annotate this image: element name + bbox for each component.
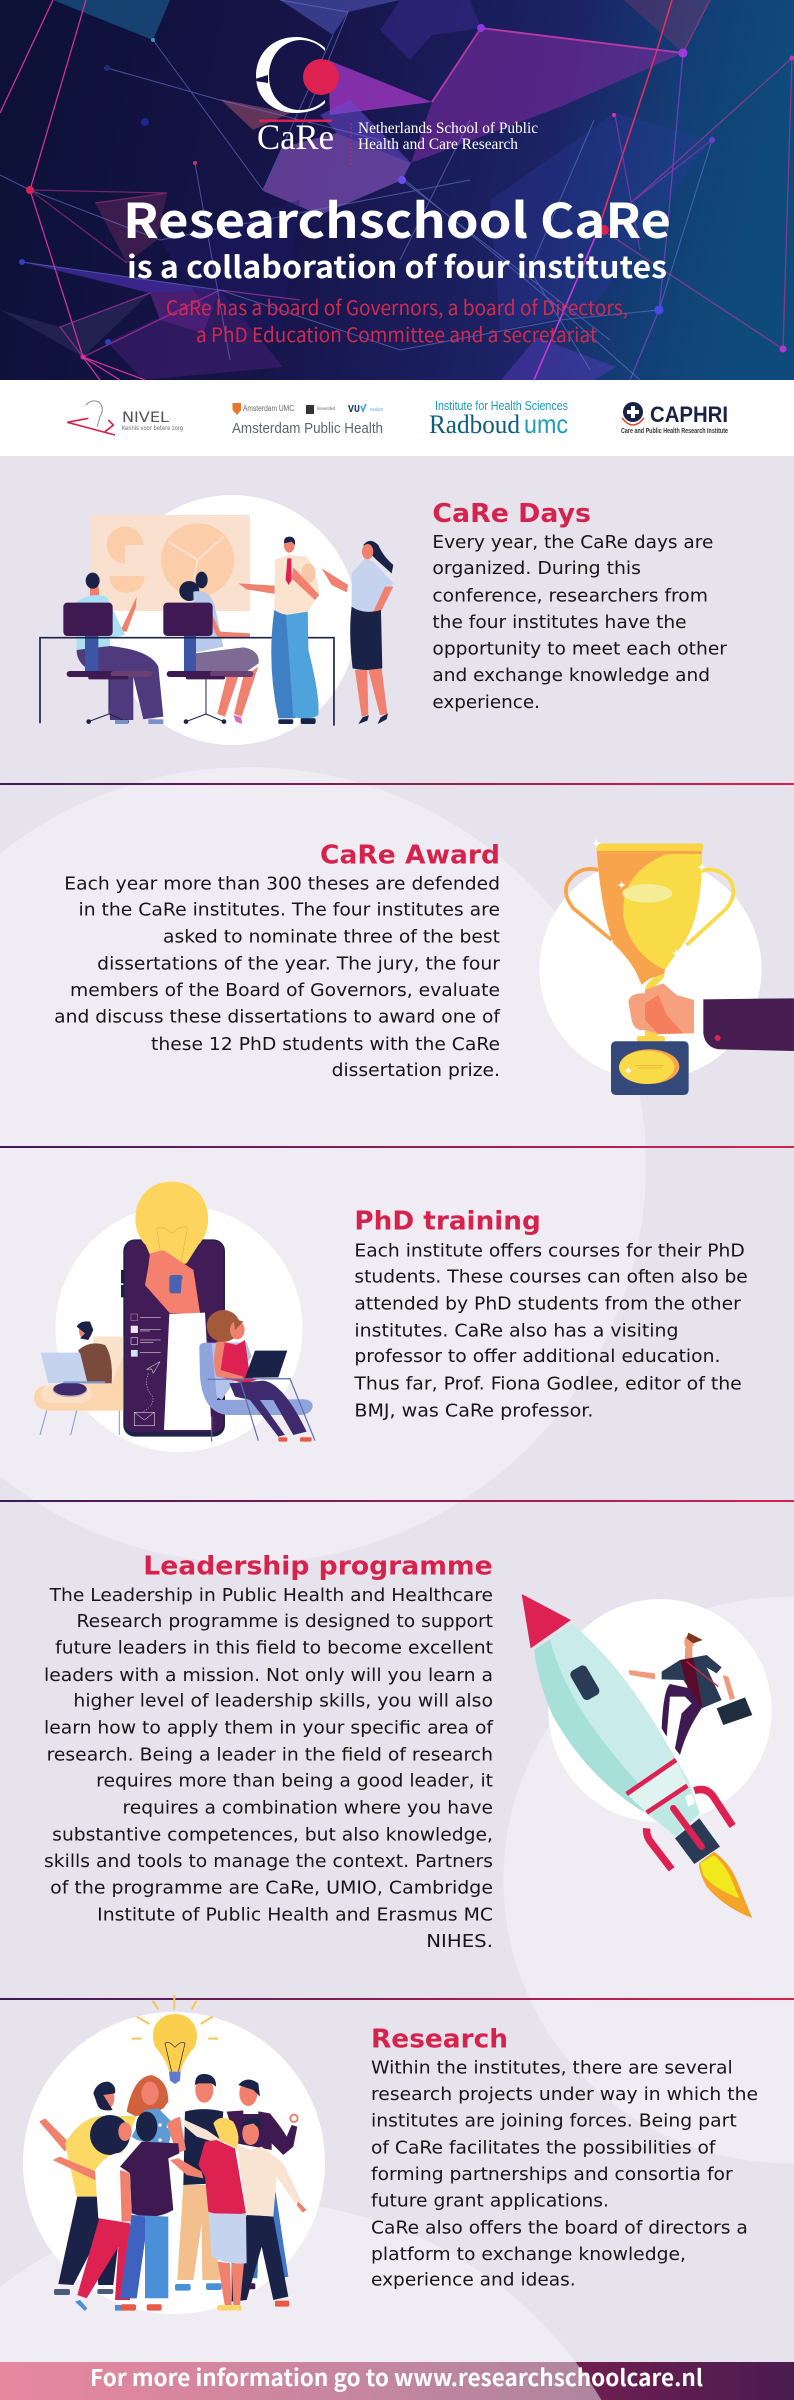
logo: Radboud umc: [429, 398, 568, 439]
person: centre: [195, 2077, 213, 2103]
man on chair: [40, 1411, 119, 1435]
logo strip: [0, 380, 794, 456]
text: Research body: future grant applications.: [371, 2191, 609, 2212]
heading: CaRe Award: CaRe Award: [320, 840, 500, 870]
CaRe logo: Health and Care Research: [358, 136, 518, 153]
text: Research body: of CaRe facilitates the possibilities of: [371, 2137, 716, 2158]
tagline: [166, 292, 628, 348]
logo: CAPHRI: Care and Public Health Research Institute: [621, 428, 728, 435]
CaRe logo: CaRe: [257, 117, 334, 157]
text: Leadership body: requires more than being a good leader, it: [96, 1771, 493, 1792]
panel: Leadership programme: [44, 1551, 772, 1952]
heading: PhD training: PhD training: [354, 1206, 541, 1236]
table: [40, 638, 334, 726]
text: CaRe Award body: these 12 PhD students with the CaRe: [151, 1034, 500, 1055]
illustration: team with lightbulb: [23, 1995, 325, 2314]
text: Leadership body: of the programme are CaRe, UMIO, Cambridge: [50, 1878, 493, 1899]
woman on chair: [199, 1342, 313, 1415]
text: PhD training body: professor to offer additional education.: [354, 1346, 720, 1367]
heading: CaRe Days: CaRe Days: [432, 499, 591, 529]
text: CaRe Award body: asked to nominate three of the best: [163, 927, 500, 948]
header banner: [0, 0, 794, 380]
text: Leadership body: substantive competences, but also knowledge,: [52, 1824, 493, 1846]
text: Research body: research projects under way in which the: [371, 2084, 758, 2105]
text: Research body: [371, 2057, 758, 2291]
text: PhD training body: institutes. CaRe also has a visiting: [354, 1320, 678, 1341]
logo: Amsterdam Public Health: Amsterdam Public Health: [232, 420, 383, 437]
text: Research body: forming partnerships and consortia for: [371, 2164, 733, 2185]
text: Leadership body: future leaders in this field to become excellent: [55, 1637, 493, 1658]
CaRe logo: [255, 37, 538, 165]
CaRe logo: Netherlands School of Public: [358, 120, 538, 137]
person: yellow shirt: [39, 2118, 70, 2152]
logo: Amsterdam Public Health: Amsterdam UMC: [243, 404, 294, 413]
text: Leadership body: research. Being a leader in the field of research: [47, 1744, 493, 1765]
title: Researchschool CaRe: [123, 182, 671, 252]
logo: Amsterdam Public Health: medisch: [370, 407, 383, 412]
text: CaRe Days body: experience.: [432, 692, 540, 713]
logo: Radboud umc: Institute for Health Sciences: [435, 398, 568, 413]
text: Research body: Within the institutes, there are several: [371, 2057, 733, 2078]
text: CaRe Days body: opportunity to meet each other: [432, 638, 728, 659]
heading: Research: Research: [371, 2025, 508, 2055]
person: right back: [239, 2081, 257, 2106]
text: Leadership body: [44, 1585, 494, 1952]
text: CaRe Days body: and exchange knowledge and: [432, 665, 710, 686]
text: Leadership body: leaders with a mission. Not only will you learn a: [44, 1665, 493, 1686]
standing woman: [322, 568, 348, 592]
seated man: [90, 583, 99, 596]
text: Leadership body: higher level of leadership skills, you will also: [73, 1691, 493, 1712]
logo: Amsterdam Public Health: VU: [348, 404, 360, 415]
standing man: [284, 537, 295, 553]
text: Research body: institutes are joining forces. Being part: [371, 2111, 737, 2132]
text: PhD training body: Each institute offers courses for their PhD: [354, 1240, 745, 1261]
background circle: award and training: [0, 767, 646, 1563]
illustration: meeting: [40, 495, 393, 745]
text: Leadership body: Research programme is designed to support: [76, 1611, 493, 1632]
footer text: For more information go to www.researchschoolcare.nl: [90, 2359, 703, 2393]
text: PhD training body: [353, 1240, 748, 1422]
illustration: trophy: [540, 837, 794, 1095]
text: Leadership body: NIHES.: [426, 1931, 493, 1952]
background circle: leadership and research: [503, 1597, 794, 2163]
lightbulb: [153, 2014, 197, 2072]
text: CaRe Award body: dissertation prize.: [332, 1060, 500, 1081]
panel: Research: [23, 1995, 758, 2314]
panel: CaRe Days: [40, 495, 728, 745]
text: CaRe Days body: conference, researchers from: [432, 585, 708, 606]
text: Leadership body: skills and tools to manage the context. Partners: [44, 1851, 493, 1872]
logo: Amsterdam Public Health: [232, 403, 383, 437]
text: CaRe Days body: organized. During this: [432, 558, 641, 579]
text: PhD training body: BMJ, was CaRe professor.: [354, 1400, 593, 1422]
text: Leadership body: requires a combination where you have: [122, 1798, 493, 1819]
logo: Radboud umc: umc: [524, 409, 568, 439]
seated woman: [179, 581, 199, 601]
text: CaRe Days body: the four institutes have the: [432, 612, 687, 633]
text: PhD training body: attended by PhD students from the other: [354, 1294, 741, 1314]
tagline: a PhD Education Committee and a secretariat: [196, 319, 597, 348]
logo: NIVEL: [67, 401, 183, 435]
man on rocket: [628, 1670, 655, 1679]
text: CaRe Days body: [432, 532, 728, 713]
logo: Amsterdam Public Health: Universiteit: [317, 406, 335, 411]
illustration: rocket: [522, 1594, 772, 1918]
tagline: CaRe has a board of Governors, a board of Directors,: [166, 292, 628, 321]
person: right back trousers: [247, 2177, 288, 2278]
text: Leadership body: Institute of Public Health and Erasmus MC: [97, 1905, 493, 1926]
text: Leadership body: The Leadership in Public Health and Healthcare: [49, 1585, 493, 1606]
person: curly hair: [90, 2115, 130, 2155]
footer bar: [0, 2359, 794, 2400]
text: CaRe Award body: Each year more than 300 theses are defended: [64, 873, 500, 894]
illustration: phone with bulb: [34, 1182, 315, 1452]
logo: CAPHRI: [621, 402, 728, 435]
person: purple t-shirt: [136, 2112, 157, 2142]
text: CaRe Award body: dissertations of the year. The jury, the four: [97, 954, 501, 974]
panel: PhD training: [34, 1182, 748, 1452]
logo: CAPHRI: CAPHRI: [650, 402, 728, 427]
text: CaRe Award body: in the CaRe institutes. The four institutes are: [78, 899, 500, 920]
background circle: research bottom: [0, 2201, 601, 2400]
text: Research body: experience and ideas.: [371, 2270, 576, 2291]
logo: NIVEL: Kennis voor betere zorg: [122, 424, 183, 432]
text: Research body: platform to exchange knowledge,: [371, 2244, 686, 2265]
text: CaRe Days body: Every year, the CaRe days are: [432, 532, 713, 553]
text: Leadership body: learn how to apply them in your specific area of: [44, 1718, 494, 1738]
text: CaRe Award body: members of the Board of Governors, evaluate: [70, 980, 500, 1001]
text: PhD training body: Thus far, Prof. Fiona Godlee, editor of the: [353, 1374, 742, 1395]
logo: NIVEL: NIVEL: [122, 410, 169, 426]
person: blonde: [183, 2119, 223, 2143]
subtitle: is a collaboration of four institutes: [127, 243, 667, 287]
text: CaRe Award body: [54, 873, 501, 1081]
text: CaRe Award body: and discuss these dissertations to award one of: [54, 1006, 501, 1027]
person: red hair: [127, 2075, 168, 2116]
heading: Leadership programme: Leadership programme: [143, 1551, 493, 1581]
logo: Radboud umc: Radboud: [429, 410, 520, 439]
network pattern: [0, 0, 794, 380]
person: cream sweater: [242, 2122, 259, 2145]
panel: CaRe Award: [54, 837, 794, 1095]
text: PhD training body: students. These courses can often also be: [354, 1267, 748, 1288]
text: Research body: CaRe also offers the board of directors a: [371, 2217, 748, 2238]
